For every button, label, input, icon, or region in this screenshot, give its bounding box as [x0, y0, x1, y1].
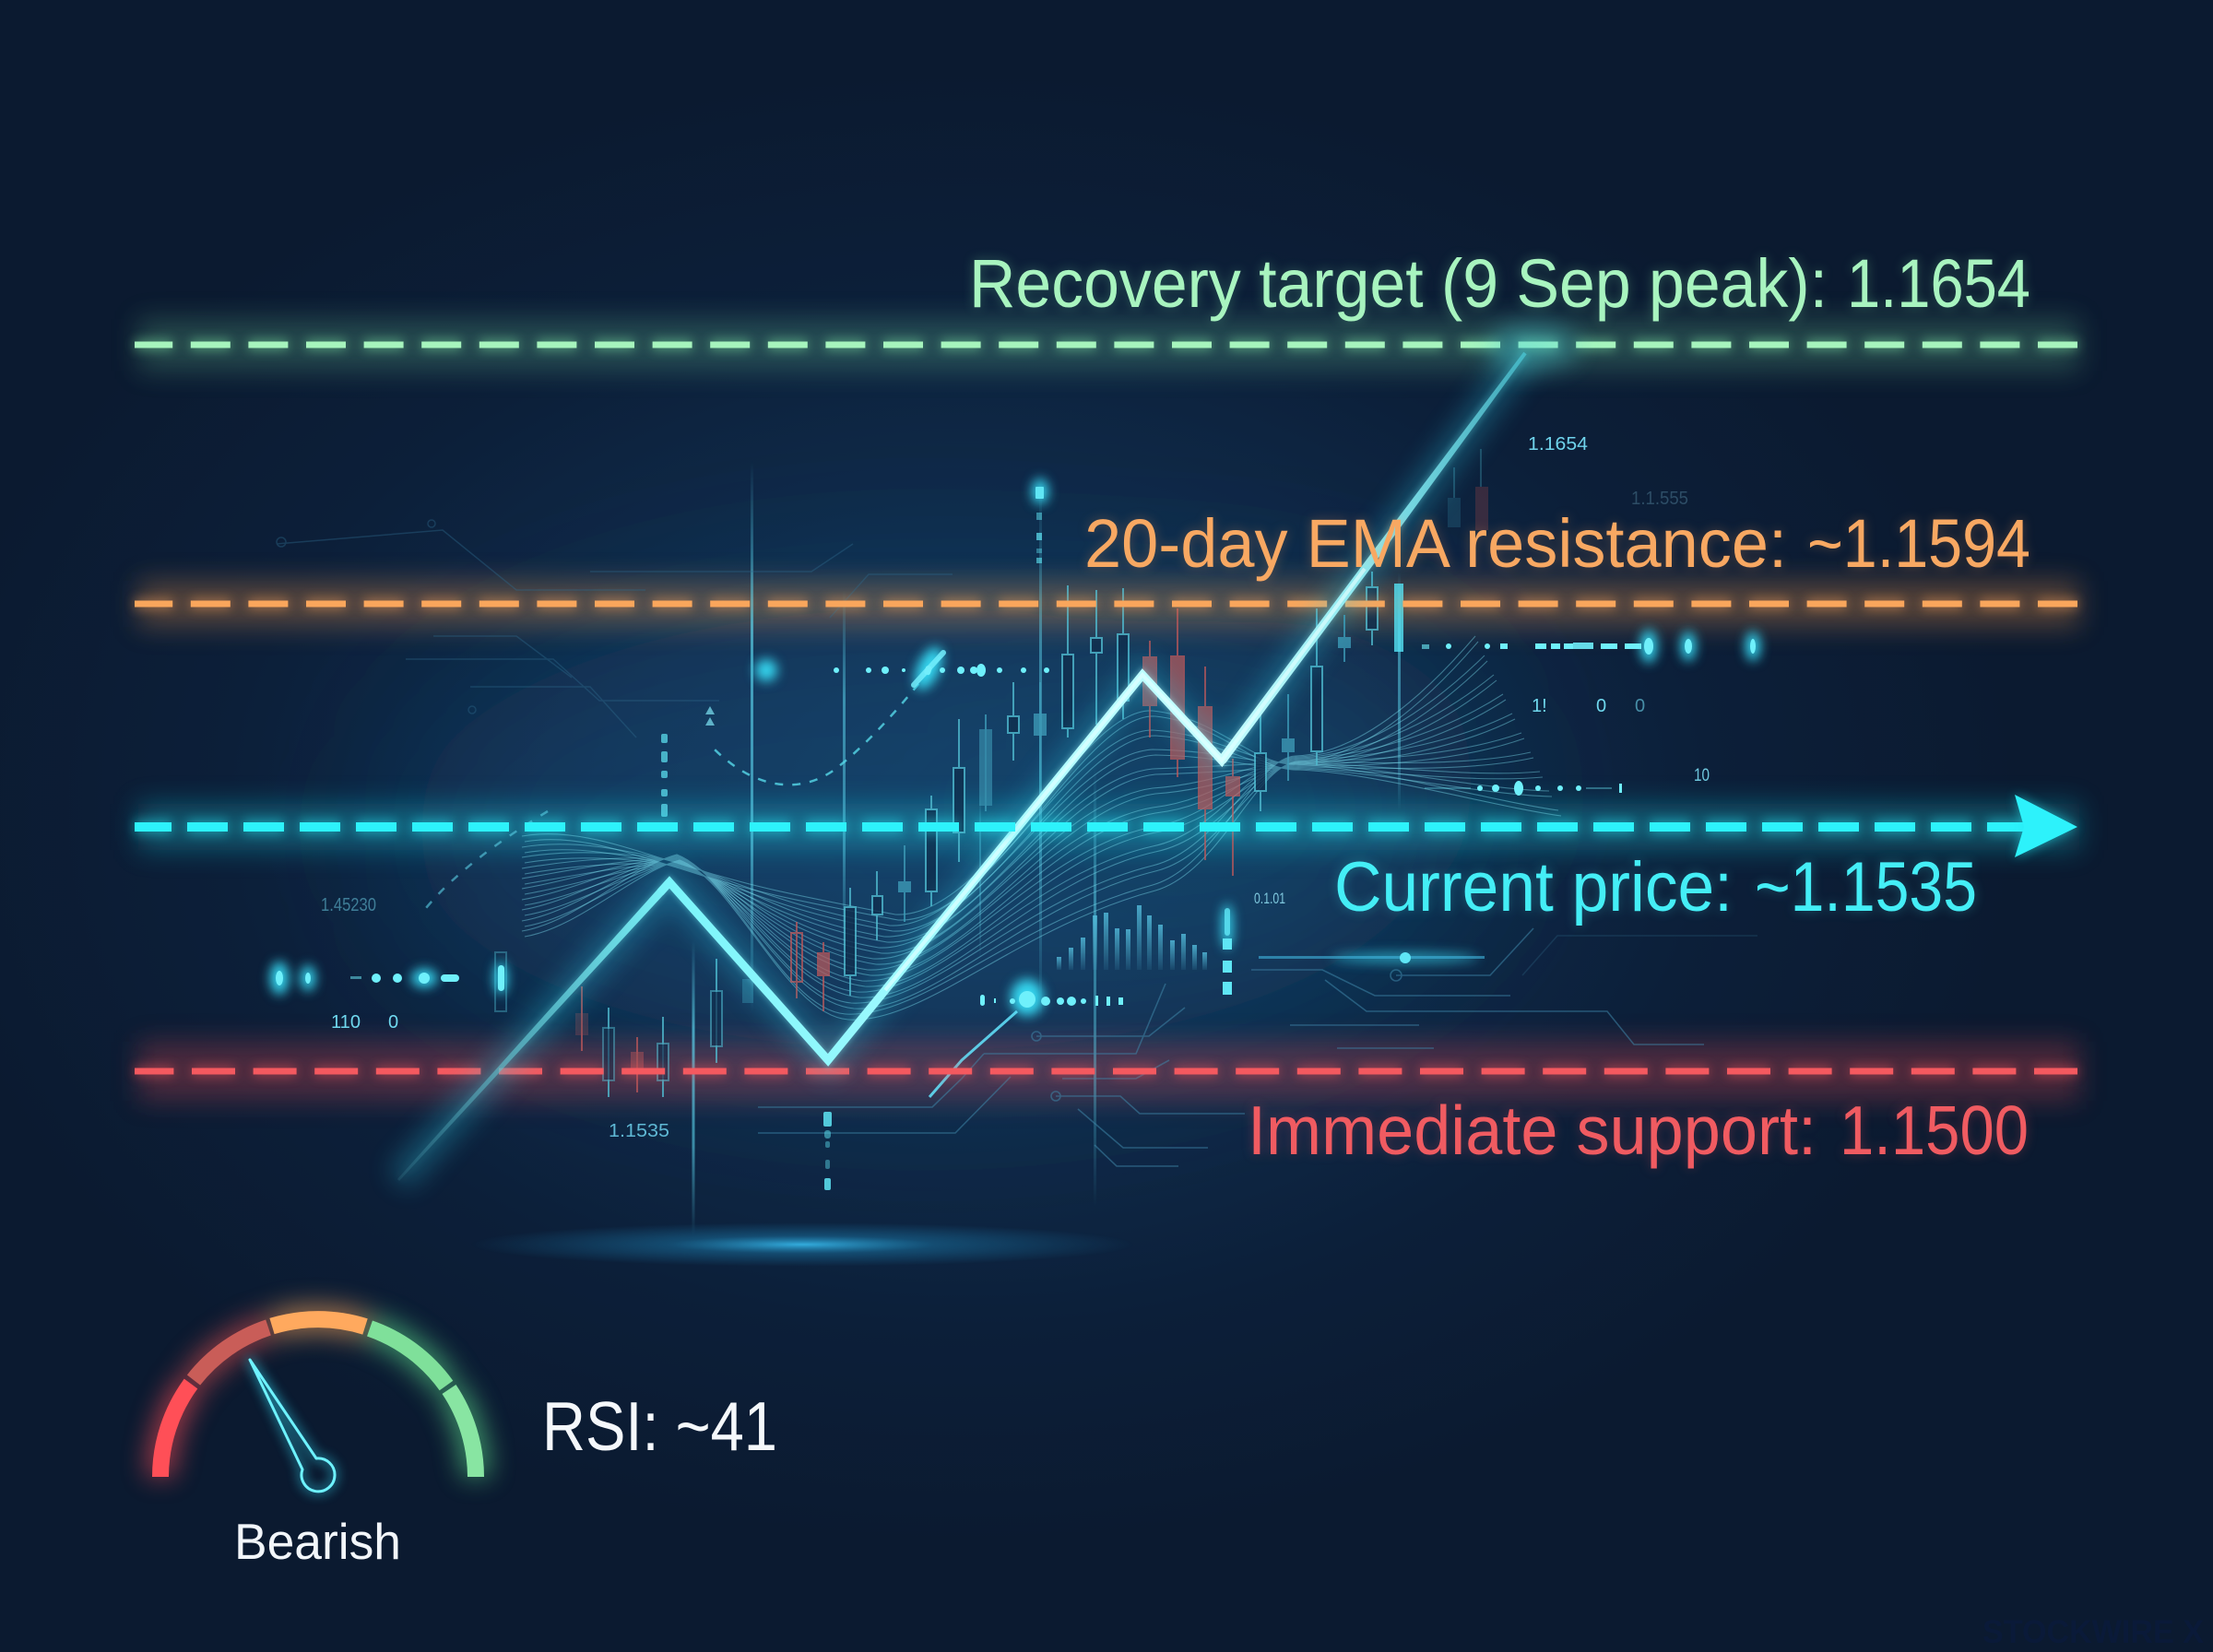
- small number 110 0: 110: [331, 1012, 361, 1032]
- label: recovery target: Recovery target (9 Sep peak):: [969, 245, 1828, 322]
- label: RSI value: RSI: ~41: [542, 1387, 777, 1465]
- candles: red: [576, 608, 1239, 1092]
- line: current price with arrow: [135, 795, 2077, 857]
- line: recovery target: [135, 339, 2077, 350]
- glowing diagonal mark: [914, 653, 943, 685]
- upper-left circuit traces: [277, 520, 953, 738]
- node trace right: [1259, 956, 1485, 959]
- icon: arrow head: [2015, 795, 2077, 857]
- small number 1 0 0: 0: [1596, 696, 1606, 716]
- dashed curve upper: [710, 656, 941, 785]
- candles: teal filled: [743, 615, 1350, 1002]
- line centre segments: [660, 675, 1231, 1060]
- RSI gauge: [160, 1319, 476, 1492]
- glowing candle: [1394, 584, 1403, 652]
- line bright core: [885, 569, 1365, 990]
- column right: [1223, 908, 1232, 995]
- circuit traces: [758, 928, 1757, 1166]
- line top taper: [1218, 352, 1527, 763]
- target glow node: [1488, 324, 1577, 369]
- gauge segment: muted red: [194, 1328, 268, 1380]
- column under trough: [823, 1112, 832, 1190]
- small number 1 0 0: 0: [1635, 696, 1645, 716]
- wave mesh: [522, 636, 1558, 1014]
- dashed curve left: [426, 811, 548, 908]
- small number 0.1.01: 0.1.01: [1254, 890, 1285, 907]
- gauge segment: orange: [272, 1319, 365, 1327]
- watermark: STOCKWIRE X: [1982, 1614, 2205, 1650]
- row lower right: [1425, 781, 1622, 796]
- triangle marks: [705, 706, 715, 726]
- vertical light beams: [692, 461, 1401, 1235]
- row left: [276, 965, 504, 991]
- glowing trace rising to node: [929, 1011, 1017, 1097]
- small number 1 0 0: [1532, 696, 1645, 716]
- data dots and pills: [270, 478, 1760, 1190]
- row upper left: [834, 664, 1049, 677]
- label: recovery target: 1.1654: [1847, 245, 2030, 322]
- small number 1.1654: 1.1654: [1528, 434, 1588, 454]
- horizontal glow bands: [138, 319, 2079, 1101]
- label: current price: ~1.1535: [1755, 848, 1977, 926]
- small number 10: 10: [1694, 766, 1710, 785]
- line: immediate support: [135, 1066, 2077, 1077]
- label: current price: [1334, 848, 1977, 926]
- volume bars: [1057, 905, 1207, 970]
- label: 20-day EMA resistance: 20-day EMA resistance:: [1084, 505, 1787, 582]
- small number 110 0: 0: [388, 1012, 398, 1032]
- candles: teal hollow: [495, 572, 1378, 1097]
- main price zigzag line: [397, 352, 1527, 1181]
- gauge glow: [160, 1319, 476, 1477]
- column upper: [1035, 487, 1044, 563]
- gauge segment: bright red: [160, 1384, 191, 1477]
- line tail taper: [397, 879, 672, 1181]
- label: immediate support: Immediate support:: [1248, 1092, 1817, 1169]
- row upper right: [1422, 638, 1756, 655]
- label: immediate support: 1.1500: [1840, 1092, 2029, 1169]
- label: 20-day EMA resistance: ~1.1594: [1807, 505, 2030, 582]
- label: current price: Current price:: [1334, 848, 1733, 926]
- candlestick chart: [495, 449, 1488, 1097]
- small number 1.45230: 1.45230: [321, 895, 376, 915]
- row lower middle: [980, 991, 1123, 1008]
- dot glows: [270, 478, 1760, 1016]
- faint candles above resistance: [1448, 449, 1488, 530]
- gauge needle: [250, 1360, 335, 1492]
- small number 1.1.555: 1.1.555: [1631, 489, 1688, 509]
- label: Bearish: Bearish: [234, 1513, 401, 1570]
- floor glow: [470, 1222, 1134, 1267]
- gauge segment: green: [370, 1328, 446, 1386]
- small number 110 0: [331, 1012, 398, 1032]
- gauge segment: light green: [449, 1389, 476, 1477]
- column left of chart: [661, 734, 668, 817]
- small number 1.1535: 1.1535: [609, 1121, 669, 1141]
- small number 1 0 0: 1!: [1532, 696, 1547, 716]
- central backdrop glow: [406, 608, 1485, 1051]
- wave mesh second layer: [525, 642, 1561, 1020]
- line: 20-day EMA resistance: [135, 598, 2077, 609]
